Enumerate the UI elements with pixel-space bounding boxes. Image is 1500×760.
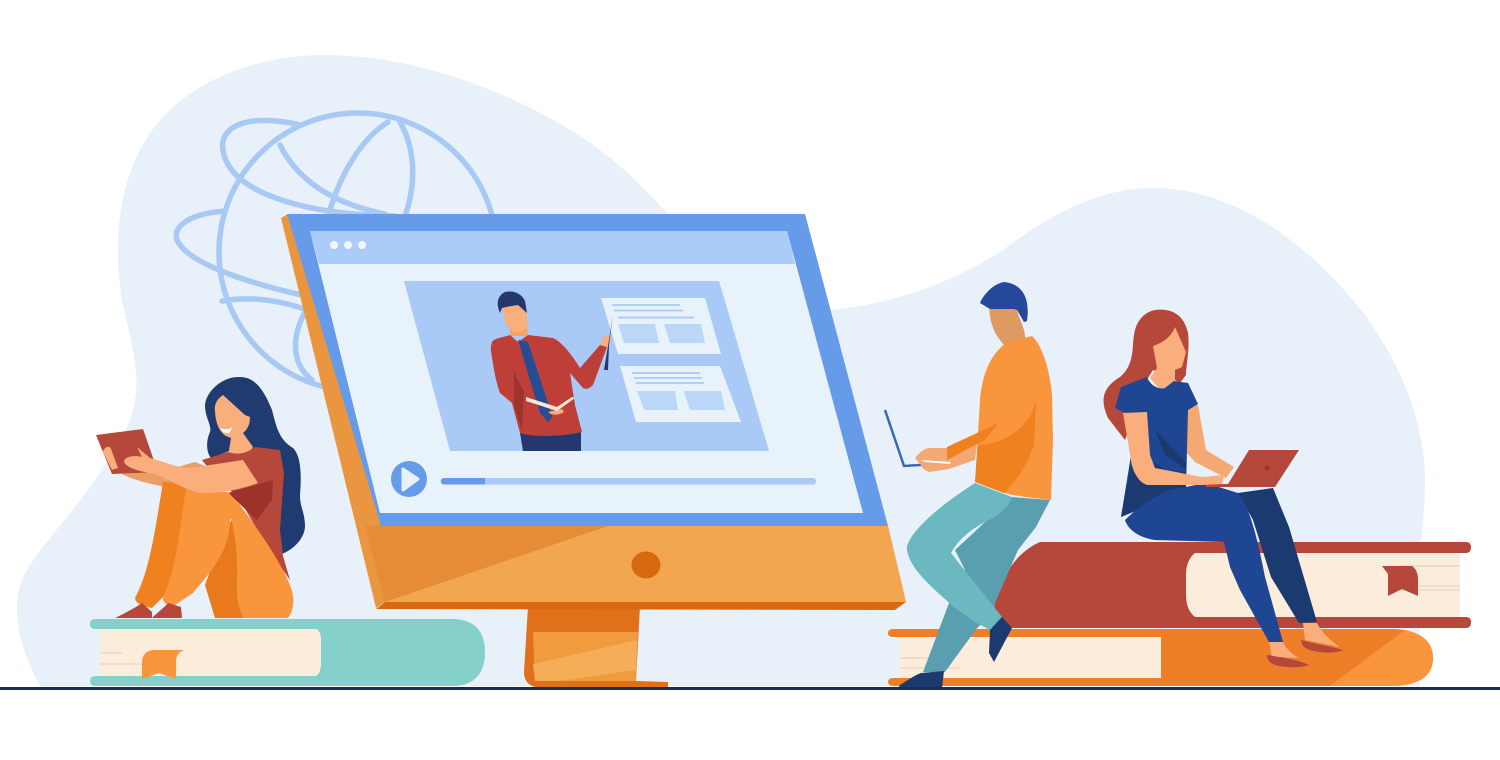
tablet [96,429,158,474]
icon: bookmark red [1382,566,1418,596]
person: man with laptop [885,282,1053,688]
shoes [898,617,1012,688]
slide card bottom [620,366,741,422]
icon: bookmark orange [142,650,184,679]
back leg [923,497,1050,672]
neck and face [989,305,1032,352]
sweater [975,336,1053,500]
shoes [115,603,182,618]
back leg [1238,488,1317,623]
slide card top [601,298,721,354]
front arm [124,447,258,493]
icon: globe [176,113,497,391]
hands [915,443,977,472]
presenter [491,291,613,451]
screen [310,231,863,513]
left arm [1123,412,1224,485]
person: woman with tablet [96,377,305,618]
background blob [17,55,1425,686]
shoes [1267,640,1343,667]
shirt [202,447,290,580]
red book [991,542,1471,628]
video panel [404,281,769,451]
feet [1269,623,1340,658]
hair [205,377,305,554]
back arm [118,462,205,488]
face [1150,327,1186,392]
front leg [1125,483,1283,642]
ground line [0,687,1500,690]
monitor stand [524,606,668,687]
right arm [1186,405,1234,478]
hair [980,282,1028,322]
shirt [1115,377,1198,517]
laptop [1206,450,1299,487]
orange book [888,629,1433,686]
monitor [281,214,906,610]
play button [391,461,427,497]
laptop [885,410,951,466]
person: woman with laptop [1104,310,1343,667]
front leg [907,483,1012,630]
progress bar [441,478,816,484]
teal book [90,619,485,686]
pants [135,482,293,618]
hair [1104,310,1189,440]
neck and face [215,395,253,456]
